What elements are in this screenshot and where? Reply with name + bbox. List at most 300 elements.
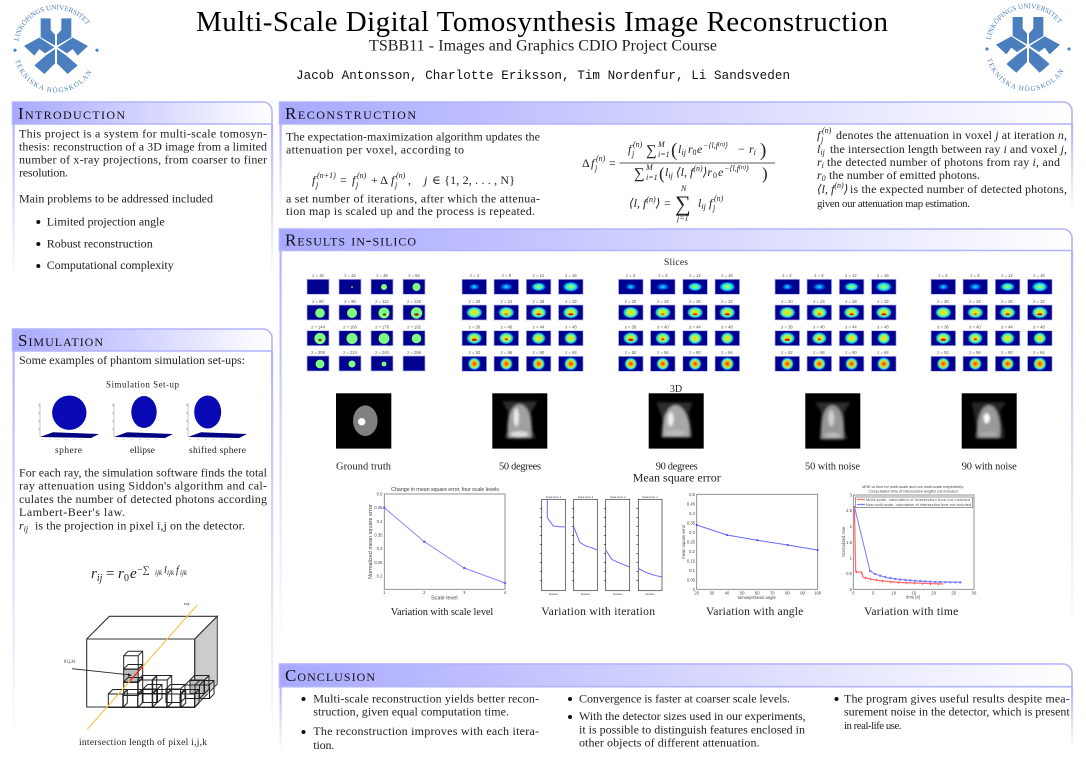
logo: right university seal: [985, 4, 1071, 92]
slices: 50 degrees grid: z = 44: [533, 324, 545, 330]
text: algorithm intro: [286, 130, 540, 156]
chart: variation with angle: 0.5: [689, 492, 696, 497]
slices: 50 with noise grid: z = 32: [877, 299, 889, 304]
slices: 50 degrees grid: z = 36: [469, 324, 481, 330]
slices: 50 degrees grid: z = 12: [533, 273, 545, 278]
slices: ground truth grid: z = 256: [407, 350, 422, 355]
slices: 50 with noise grid: [775, 273, 896, 371]
chart: variation with angle: 20: [694, 590, 700, 596]
formula: delta f fraction: ⟩: [745, 164, 749, 173]
image: ground truth: [336, 393, 391, 449]
slices: 50 degrees grid: z = 20: [469, 299, 481, 304]
chart: variation with time: 5: [872, 590, 875, 596]
slices: ground truth grid: z = 80: [312, 299, 324, 304]
slices: 90 degrees grid: z = 12: [689, 273, 701, 278]
list: conclusion column 2: other objects of different attenuation.: [579, 736, 760, 750]
formula: delta f fraction: M: [645, 163, 654, 172]
formula: projection: −∑: [137, 565, 150, 576]
chart: variation with time: 25: [951, 590, 957, 596]
text: symbol definitions: (n): [834, 181, 844, 190]
chart: variation with scale level: 0.35: [374, 532, 383, 538]
chart: variation with scale level: 0.45: [374, 505, 383, 510]
list: conclusion column 1: Multi-scale reconstruction yields better recon-: [313, 691, 539, 705]
formula: projection: =: [106, 566, 114, 582]
chart: variation with time: 2: [850, 524, 853, 529]
text: symbol definitions: j: [820, 136, 824, 144]
formula: delta f fraction: ): [762, 164, 768, 183]
chart: variation with angle: 0.3: [689, 530, 696, 535]
formula: delta f fraction: i=1: [658, 150, 670, 159]
formula: expected value sum: ⟨l, f: [629, 196, 646, 210]
slices: 50 degrees grid: z = 52: [469, 350, 481, 355]
slices: 50 with noise grid: z = 60: [845, 350, 857, 355]
slices: 90 degrees grid: z = 40: [657, 324, 669, 330]
heading: results: Results in-silico: [285, 230, 416, 250]
text: iterations note: a set number of iterations, after which the attenua-: [286, 192, 540, 206]
slices: 50 degrees grid: z = 4: [470, 273, 480, 278]
figure: phantom set-ups: Simulation Set-up: [106, 380, 180, 390]
logo: left university seal: [13, 4, 99, 92]
slices: 50 degrees grid: z = 48: [565, 324, 577, 330]
text: symbol definitions: is the expected number of detected photons,: [850, 182, 1067, 196]
slices: 50 with noise grid: z = 64: [877, 350, 889, 355]
formula: delta f fraction: ⟩: [724, 141, 728, 150]
slices: 50 with noise grid: z = 12: [845, 273, 857, 278]
slices: 50 degrees grid: z = 56: [501, 350, 513, 355]
slices: ground truth grid: z = 64: [408, 273, 420, 278]
chart: variation with angle: 0.05: [687, 577, 696, 582]
chart: variation with time: [841, 485, 977, 600]
slices: 90 with noise grid: z = 8: [970, 273, 980, 278]
subtitle: TSBB11 - Images and Graphics CDIO Project Course: [369, 38, 717, 54]
slices: 50 degrees grid: z = 64: [565, 350, 577, 355]
text: ray attenuation explanation: culates the number of detected photons according: [19, 492, 267, 506]
chart: variation with angle: 0.35: [687, 520, 696, 525]
chart: variation with time: Normalized mse: [841, 526, 846, 557]
text: ray attenuation explanation: [19, 466, 268, 533]
slices: ground truth grid: z = 208: [311, 350, 326, 355]
authors: Jacob Antonsson, Charlotte Eriksson, Tim Nordenfur, Li Sandsveden: [296, 69, 790, 83]
slices: 50 with noise grid: z = 4: [782, 273, 792, 278]
text: algorithm intro: The expectation-maximization algorithm updates the: [286, 130, 540, 144]
chart: variation with iteration: Iteration: [549, 592, 559, 596]
text: symbol definitions: r: [817, 155, 822, 169]
chart: variation with scale level: 1: [383, 590, 386, 595]
caption: variation with scale level: Variation with scale level: [391, 607, 493, 618]
chart: variation with iteration: Scale level: 4: [546, 495, 562, 499]
slices: 50 with noise grid: z = 52: [781, 350, 793, 355]
text: introduction paragraph: This project is a system for multi-scale tomosyn-: [19, 127, 267, 141]
chart: variation with scale level: 0.2: [377, 574, 383, 578]
text: symbol definitions: [817, 126, 1067, 210]
chart: variation with time: 15: [911, 590, 917, 596]
list: main problems: [36, 214, 174, 272]
formula: expected value sum: j=1: [676, 214, 689, 223]
formula: expected value sum: [629, 184, 724, 223]
slices: ground truth grid: z = 32: [344, 273, 356, 278]
text: ray attenuation explanation: Lambert-Beer's law.: [19, 505, 125, 519]
chart: variation with angle: 0.2: [689, 549, 696, 554]
chart: variation with scale level: 4: [504, 590, 507, 595]
label: slices: Slices: [664, 258, 688, 268]
chart: variation with iteration: [541, 495, 662, 596]
formula: projection: r: [91, 566, 97, 582]
caption: variation with angle: Variation with angle: [706, 605, 803, 618]
formula: update rule: f: [391, 173, 394, 187]
slices: 90 with noise grid: z = 36: [937, 324, 949, 330]
formula: update rule: j: [394, 180, 398, 190]
text: ray attenuation explanation: ij: [24, 524, 29, 533]
slices: 90 with noise grid: z = 4: [938, 273, 948, 278]
logo: right university seal: TEKNISKA HÖGSKOLAN: [988, 58, 1064, 92]
list: conclusion column 2: [568, 691, 806, 750]
heading: introduction: Introduction: [18, 104, 125, 123]
text: symbol definitions: denotes the attenuation in voxel j at iteration n,: [836, 128, 1067, 142]
text: introduction paragraph: Main problems to be addressed included: [19, 192, 213, 206]
caption: 90 with noise: 90 with noise: [962, 461, 1017, 472]
figure: intersection length diagram: l(i,j,k): [64, 659, 76, 665]
formula: projection: f: [176, 565, 180, 576]
slices: 90 with noise grid: z = 44: [1001, 324, 1013, 330]
caption: 90 degrees: 90 degrees: [656, 461, 698, 472]
slices: 50 degrees grid: z = 24: [501, 299, 513, 304]
slices: 50 degrees grid: z = 8: [502, 273, 512, 278]
slices: 90 with noise grid: z = 12: [1001, 273, 1013, 278]
formula: delta f fraction: ⟩r: [702, 165, 712, 179]
formula: update rule: j: [422, 173, 428, 187]
formula: expected value sum: (n): [714, 194, 724, 203]
panel: simulation: [12, 329, 273, 748]
slices: 50 degrees grid: z = 16: [565, 273, 577, 278]
chart: variation with time: MSE vs time for multi-scale and non multi-scale respectively.: [862, 485, 964, 489]
formula: delta f fraction: (: [659, 164, 665, 183]
chart: variation with time: 3: [850, 492, 853, 498]
list: main problems: Limited projection angle: [47, 214, 165, 228]
slices: 90 degrees grid: z = 24: [657, 299, 669, 304]
chart: variation with time: Multi-scale, calculation of intersection time not included: [866, 498, 970, 502]
formula: expected value sum: =: [664, 196, 671, 210]
chart: variation with angle: tomosynthesis angle: [738, 595, 776, 600]
formula: update rule: f: [312, 173, 315, 187]
image: 50 with noise reconstruction: [805, 393, 860, 449]
formula: delta f fraction: −⟨l,f: [724, 164, 739, 173]
formula: delta f fraction: Δ: [582, 156, 590, 170]
formula: delta f fraction: (: [671, 140, 677, 161]
slices: ground truth grid: z = 144: [311, 324, 326, 330]
chart: variation with angle: 60: [755, 590, 760, 596]
formula: delta f fraction: 0: [692, 148, 696, 157]
formula: update rule: (n): [396, 171, 406, 180]
label: 3D: 3D: [670, 384, 682, 395]
slices: 50 with noise grid: z = 8: [814, 273, 824, 278]
chart: variation with angle: 90: [800, 590, 806, 596]
formula: delta f fraction: (n): [718, 141, 725, 148]
chart: variation with time: 0: [850, 587, 853, 592]
formula: projection: ij: [97, 573, 103, 584]
chart: variation with angle: 0: [693, 587, 696, 592]
text: symbol definitions: the detected number of photons from ray i, and: [827, 155, 1060, 169]
chart: variation with angle: 0.4: [689, 511, 696, 516]
chart: variation with time: 0: [852, 590, 855, 596]
chart: variation with angle: 50: [740, 590, 745, 596]
slices: 90 degrees grid: z = 20: [625, 299, 637, 304]
slices: 50 with noise grid: z = 24: [813, 299, 825, 304]
chart: variation with iteration: Scale level: 2: [610, 495, 626, 499]
panel: introduction: [12, 102, 273, 280]
slices: ground truth grid: z = 48: [376, 273, 388, 278]
panel: conclusion: [280, 664, 1073, 752]
chart: variation with time: 20: [931, 590, 937, 596]
formula: delta f fraction: [582, 140, 775, 183]
formula: delta f fraction: −⟨l,f: [703, 141, 718, 150]
caption: 50 degrees: 50 degrees: [499, 461, 541, 472]
formula: projection: 0: [124, 573, 129, 584]
slices: 90 degrees grid: z = 48: [721, 324, 733, 330]
image: 50 degrees reconstruction: [492, 393, 547, 449]
formula: delta f fraction: −: [738, 142, 745, 156]
chart: variation with time: 2.5: [846, 508, 853, 513]
formula: projection: e: [130, 566, 137, 582]
caption: variation with iteration: Variation with iteration: [541, 605, 655, 618]
formula: delta f fraction: l: [665, 165, 668, 179]
text: algorithm intro: attenuation per voxel, according to: [286, 142, 464, 156]
formula: delta f fraction: j: [594, 164, 598, 172]
formula: delta f fraction: ⟨l, f: [676, 165, 693, 179]
slices: 90 degrees grid: z = 64: [721, 350, 733, 355]
slices: 50 degrees grid: z = 60: [533, 350, 545, 355]
list: conclusion column 1: The reconstruction improves with each itera-: [313, 724, 539, 738]
chart: variation with angle: 0.25: [687, 539, 696, 544]
formula: expected value sum: ∑: [675, 191, 691, 216]
chart: variation with scale level: [368, 487, 507, 602]
text: introduction paragraph: [19, 127, 267, 206]
chart: variation with angle: 30: [709, 590, 715, 596]
text: ray attenuation explanation: For each ray, the simulation software finds the total: [19, 466, 268, 480]
slices: 90 degrees grid: z = 52: [625, 350, 637, 355]
image: 90 degrees reconstruction: [649, 393, 704, 449]
formula: update rule: + Δ: [371, 173, 388, 187]
text: symbol definitions: ⟩: [843, 182, 848, 196]
formula: delta f fraction: 0: [713, 171, 717, 180]
slices: 90 degrees grid: z = 4: [626, 273, 636, 278]
figure: phantom set-ups: ellipse: [130, 446, 155, 456]
slices: 90 degrees grid: z = 8: [658, 273, 668, 278]
chart: variation with angle: 80: [785, 590, 790, 596]
list: conclusion column 3: surement noise in the detector, which is present: [844, 704, 1070, 718]
chart: variation with time: Computation time of intersection lengths not included: [868, 490, 958, 494]
formula: delta f fraction: ij: [682, 148, 687, 157]
heading: conclusion: Conclusion: [285, 666, 375, 685]
slices: 90 with noise grid: z = 52: [937, 350, 949, 355]
formula: delta f fraction: e: [718, 165, 724, 179]
caption: intersection length: intersection length of pixel i,j,k: [79, 737, 207, 748]
slices: ground truth grid: z = 128: [407, 299, 422, 304]
slices: 90 with noise grid: z = 40: [969, 324, 981, 330]
list: conclusion column 3: [834, 691, 1070, 732]
slices: 50 degrees grid: z = 40: [501, 324, 513, 330]
slices: 90 degrees grid: z = 44: [689, 324, 701, 330]
chart: variation with angle: 0.1: [689, 568, 696, 573]
chart: variation with time: 30: [972, 590, 977, 596]
formula: delta f fraction: ): [760, 140, 766, 161]
slices: 90 degrees grid: z = 36: [625, 324, 637, 330]
slices: 90 with noise grid: z = 32: [1033, 299, 1045, 304]
slices: 90 degrees grid: z = 60: [689, 350, 701, 355]
formula: expected value sum: l: [698, 196, 701, 210]
formula: projection: r: [118, 566, 124, 582]
chart: variation with angle: mean square error: [681, 524, 686, 559]
slices: ground truth grid: z = 96: [344, 299, 356, 304]
logo: right university seal: LINKÖPINGS UNIVERSITET: [986, 4, 1062, 40]
chart: variation with time: Non-multi-scale, calculation of intersection time not included: [866, 503, 971, 507]
slices: 50 with noise grid: z = 36: [781, 324, 793, 330]
slices: 50 degrees grid: z = 32: [565, 299, 577, 304]
chart: variation with angle: 100: [814, 590, 822, 596]
slices: 50 with noise grid: z = 48: [877, 324, 889, 330]
formula: delta f fraction: f: [591, 156, 594, 170]
chart: variation with scale level: Scale level: [431, 596, 458, 602]
list: conclusion column 3: The program gives useful results despite mea-: [844, 691, 1070, 705]
figure: phantom set-ups: shifted sphere: [189, 445, 246, 456]
figure: phantom set-ups: sphere: [55, 446, 82, 456]
slices: ground truth grid: [307, 273, 425, 371]
formula: delta f fraction: (n): [596, 154, 606, 163]
chart: variation with scale level: 2: [423, 590, 426, 595]
list: conclusion column 1: struction, given equal computation time.: [313, 705, 509, 719]
slices: 90 degrees grid: z = 28: [689, 299, 701, 304]
formula: update rule: [312, 171, 515, 190]
formula: delta f fraction: ij: [668, 171, 674, 180]
formula: update rule: f: [352, 173, 355, 187]
text: introduction paragraph: thesis: reconstruction of a 3D image from a limited: [19, 140, 267, 154]
slices: 90 with noise grid: z = 20: [937, 299, 949, 304]
title: Multi-Scale Digital Tomosynthesis Image Reconstruction: [196, 6, 888, 38]
list: conclusion column 3: in real-life use.: [844, 720, 902, 732]
text: symbol definitions: f: [817, 128, 820, 142]
text: introduction paragraph: number of x-ray projections, from coarser to finer: [19, 152, 267, 166]
slices: 90 degrees grid: [618, 273, 740, 371]
figure: intersection length diagram: ray: [184, 601, 190, 606]
formula: expected value sum: f: [709, 196, 712, 210]
slices: ground truth grid: z = 240: [375, 350, 390, 355]
formula: projection: [91, 565, 188, 584]
formula: update rule: ,: [408, 173, 411, 187]
formula: projection: l: [164, 565, 167, 576]
slices: ground truth grid: z = 112: [375, 299, 389, 304]
chart: variation with time: 1: [850, 556, 853, 560]
formula: delta f fraction: ∑: [634, 166, 645, 182]
list: main problems: Robust reconstruction: [47, 236, 153, 250]
slices: 90 degrees grid: z = 16: [721, 273, 733, 278]
figure: phantom set-ups: [38, 380, 247, 456]
formula: delta f fraction: =: [609, 156, 616, 170]
list: conclusion column 1: tion.: [313, 738, 334, 752]
chart: variation with time: 0.5: [846, 571, 853, 576]
chart: variation with iteration: Iteration: [613, 592, 623, 596]
slices: 90 degrees grid: z = 56: [657, 350, 669, 355]
text: symbol definitions: l: [817, 142, 820, 156]
slices: 50 with noise grid: z = 16: [877, 273, 889, 278]
slices: 90 degrees grid: z = 32: [721, 299, 733, 304]
image: 90 with noise reconstruction: [962, 393, 1017, 449]
slices: 50 degrees grid: [462, 273, 583, 371]
logo: left university seal: TEKNISKA HÖGSKOLAN: [16, 59, 92, 92]
formula: expected value sum: ⟩: [655, 196, 660, 210]
chart: variation with time: 10: [891, 590, 897, 596]
chart: variation with angle: 0.45: [687, 501, 696, 506]
chart: variation with scale level: 0.5: [377, 492, 383, 496]
panel: results in-silico: [280, 229, 1073, 646]
slices: 90 with noise grid: z = 64: [1033, 350, 1045, 355]
chart: variation with iteration: Iteration: [645, 592, 655, 596]
text: symbol definitions: ij: [820, 148, 826, 157]
slices: ground truth grid: z = 160: [343, 324, 358, 330]
chart: variation with iteration: Iteration: [581, 592, 591, 596]
list: conclusion column 2: it is possible to distinguish features enclosed in: [579, 722, 805, 736]
text: symbol definitions: 0: [822, 174, 826, 183]
heading: reconstruction: Reconstruction: [285, 104, 416, 123]
text: symbol definitions: the intersection length between ray i and voxel j,: [830, 142, 1067, 156]
slices: 50 with noise grid: z = 44: [845, 324, 857, 330]
formula: update rule: ∈ {1, 2, . . . , N}: [432, 173, 515, 187]
chart: variation with scale level: Change in mean square error, four scale levels: [391, 487, 499, 493]
list: conclusion column 1: [302, 691, 539, 752]
formula: delta f fraction: (n): [693, 164, 703, 173]
formula: update rule: (n+1): [317, 171, 336, 180]
list: main problems: Computational complexity: [47, 258, 174, 272]
slices: 90 with noise grid: z = 24: [969, 299, 981, 304]
panel: reconstruction: [280, 102, 1073, 223]
text: symbol definitions: r: [817, 168, 822, 182]
text: iterations note: tion map is scaled up and the process is repeated.: [286, 204, 535, 218]
formula: projection: ijk: [180, 569, 188, 577]
formula: delta f fraction: M: [657, 140, 666, 149]
chart: variation with scale level: 0.4: [377, 519, 383, 524]
label: mean square error: Mean square error: [633, 471, 721, 485]
slices: 90 with noise grid: z = 48: [1033, 324, 1045, 330]
text: symbol definitions: ⟨l, f: [817, 182, 834, 196]
chart: variation with angle: 40: [725, 590, 730, 596]
formula: delta f fraction: r: [688, 142, 693, 156]
slices: 50 degrees grid: z = 28: [533, 299, 545, 304]
text: simulation intro: Some examples of phantom simulation set-ups:: [19, 353, 245, 367]
slices: 90 with noise grid: z = 60: [1001, 350, 1013, 355]
chart: variation with angle: [681, 492, 822, 600]
slices: 50 with noise grid: z = 20: [781, 299, 793, 304]
slices: ground truth grid: z = 224: [343, 350, 358, 355]
slices: 50 with noise grid: z = 56: [813, 350, 825, 355]
text: ray attenuation explanation: ray attenuation using Siddon's algorithm and cal-: [19, 479, 267, 493]
chart: variation with scale level: 3: [463, 590, 466, 595]
formula: delta f fraction: i=1: [646, 173, 658, 182]
text: symbol definitions: the number of emitted photons.: [829, 168, 980, 182]
formula: delta f fraction: l: [678, 142, 682, 156]
logo: left university seal: LINKÖPINGS UNIVERSITET: [14, 4, 90, 42]
formula: delta f fraction: f: [628, 142, 631, 156]
slices: ground truth grid: z = 16: [312, 273, 324, 278]
slices: 90 with noise grid: [931, 273, 1052, 371]
formula: expected value sum: ij: [701, 202, 707, 211]
formula: expected value sum: j: [712, 204, 716, 212]
caption: variation with time: Variation with time: [864, 605, 958, 618]
formula: delta f fraction: (n): [739, 164, 746, 171]
list: conclusion column 2: With the detector sizes used in our experiments,: [579, 709, 806, 723]
list: conclusion column 2: Convergence is faster at coarser scale levels.: [579, 691, 790, 705]
formula: delta f fraction: e: [697, 142, 703, 156]
slices: 50 with noise grid: z = 28: [845, 299, 857, 304]
chart: variation with scale level: Normalized mean square error: [368, 504, 374, 579]
slices: ground truth grid: z = 192: [407, 324, 422, 330]
